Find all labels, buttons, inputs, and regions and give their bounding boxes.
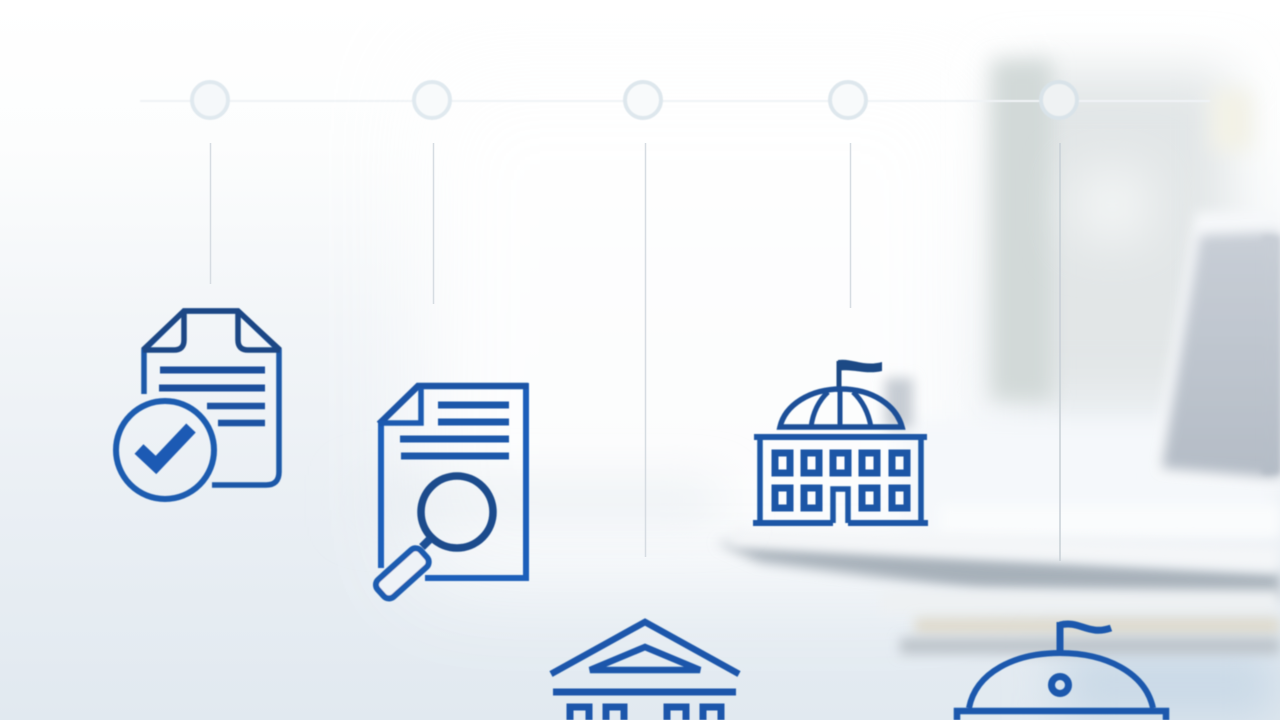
node 3 [625,82,661,118]
icon: document with check mark [116,311,280,499]
icon: classical bank building [551,622,739,720]
icon: domed capitol building [753,360,928,523]
node 1 [192,82,228,118]
timeline rail [140,82,1210,118]
connector lines [210,143,1060,561]
icon: document with magnifier [373,386,528,601]
node 5 [1041,82,1077,118]
icon: dome building with flag [957,622,1166,720]
node 4 [830,82,866,118]
node 2 [414,82,450,118]
